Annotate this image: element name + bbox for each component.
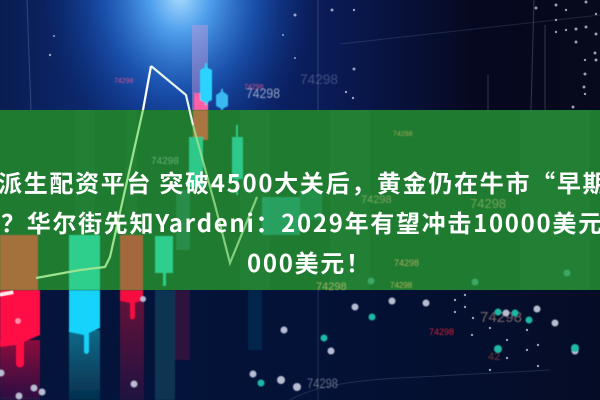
teal dots <box>258 270 579 386</box>
chart number labels: 74298 <box>429 327 454 337</box>
upper candlesticks <box>194 63 228 110</box>
chart number labels: 74298 <box>470 196 506 211</box>
upper background <box>0 0 600 110</box>
data dots <box>0 296 578 400</box>
headline <box>0 164 600 279</box>
green banner <box>0 110 600 290</box>
chart number labels: 74298 <box>361 194 392 206</box>
chart number labels: 74298 <box>114 78 134 85</box>
white line chart <box>0 66 257 295</box>
headline line 2: ？华尔街先知Yardeni：2029年有望冲击10000美元 <box>1 204 600 239</box>
headline line 3: 000美元！ <box>247 244 372 279</box>
chart number labels: 74298 <box>390 281 413 290</box>
chart number labels: 74298 <box>394 258 419 268</box>
blue light glow <box>0 0 600 110</box>
candles inside banner <box>0 110 322 290</box>
banner vertical tints <box>75 110 590 290</box>
chart number labels: 74298 <box>480 309 522 326</box>
lower candlesticks <box>0 290 143 368</box>
lower candle columns <box>0 290 262 400</box>
chart number labels: 74298 <box>151 156 179 167</box>
upper light column <box>192 25 208 110</box>
headline line 1: 派生配资平台 突破4500大关后，黄金仍在牛市“早期 <box>0 164 600 199</box>
chart number labels: 74298 <box>244 84 264 91</box>
lower background <box>0 290 600 400</box>
chart number labels: 74298 <box>307 375 338 391</box>
chart number labels: 74298 <box>300 71 338 87</box>
chart number labels: 42 <box>488 351 500 363</box>
chart number labels: 74298 <box>393 131 413 138</box>
chart number labels: 74298 <box>246 85 280 101</box>
chart number labels <box>114 71 522 391</box>
chart number labels: 74298 <box>316 281 347 293</box>
